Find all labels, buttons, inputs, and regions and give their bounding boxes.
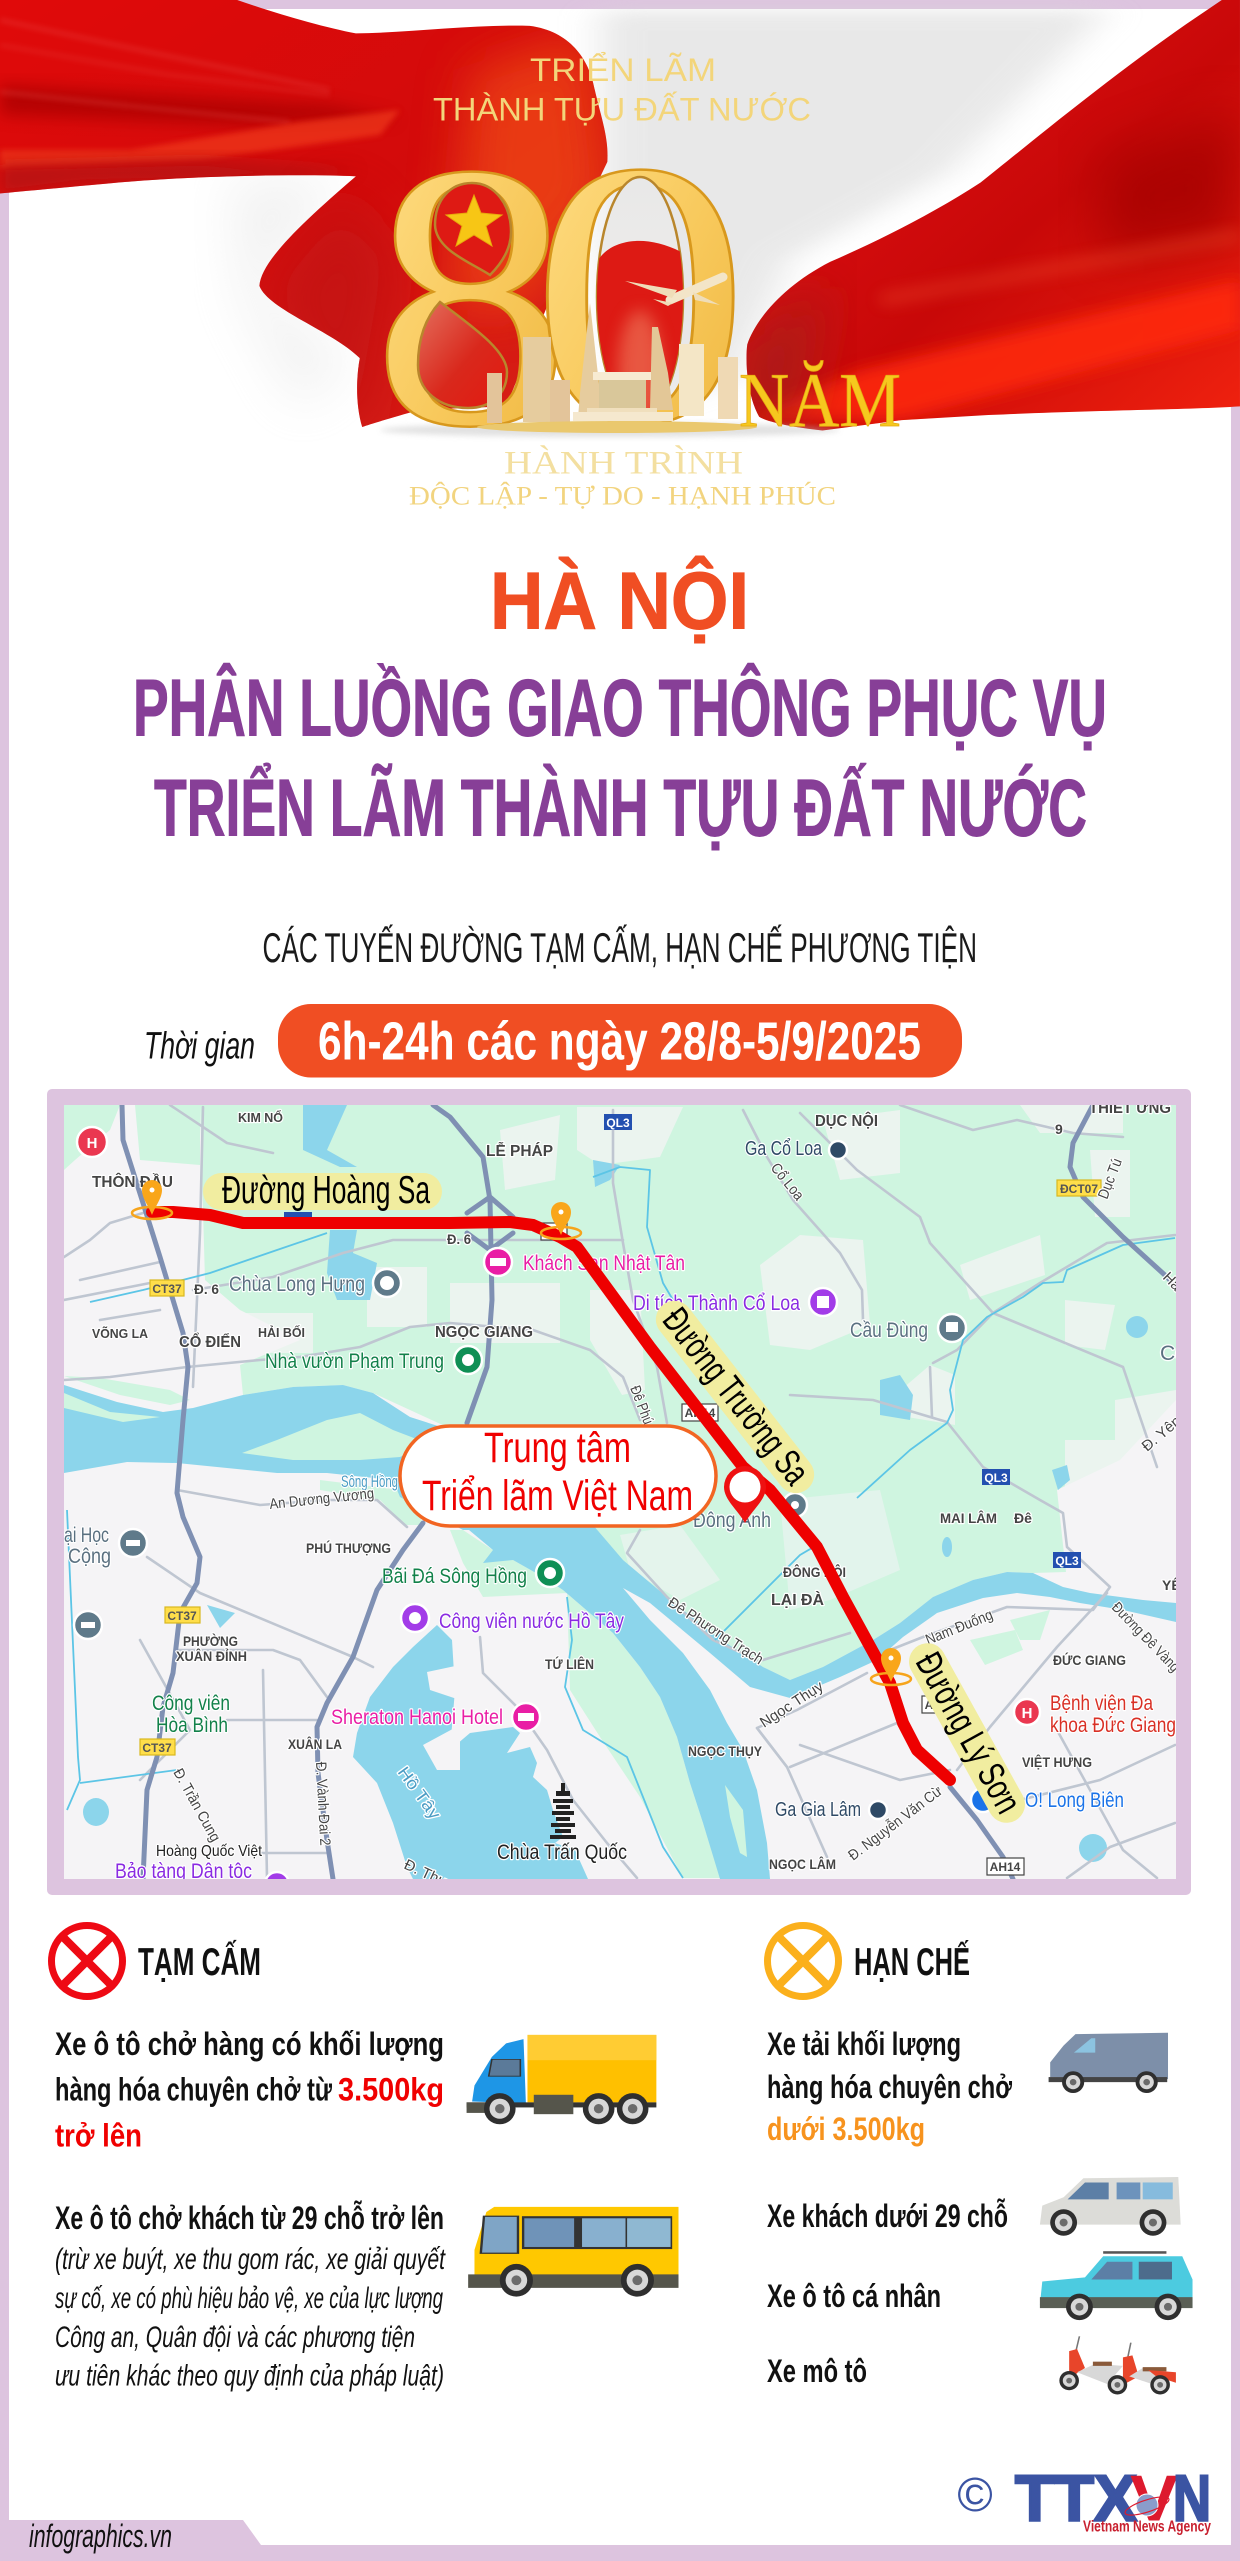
text: exemptions: Công an, Quân đội và các phương tiện	[55, 2321, 415, 2354]
map place labels: THIẾT ỨNG	[1089, 1098, 1171, 1117]
map place labels: Chùa Long Hưng	[229, 1273, 365, 1296]
label: Đường Trường Sa: Đường Trường Sa	[655, 1300, 818, 1492]
text: banned trucks: Xe ô tô chở hàng có khối lượng	[55, 2026, 444, 2062]
red ribbon left and centre	[0, 0, 640, 450]
map place labels: Nhà vườn Phạm Trung	[265, 1350, 444, 1373]
map pins: points of interest	[74, 1127, 1040, 1896]
skyline and mausoleum	[477, 303, 757, 433]
text: banned coaches: Xe ô tô chở khách từ 29 chỗ trở lên	[55, 2200, 444, 2236]
ribbon shadow on the cloth	[230, 10, 1107, 413]
icon: gold star	[446, 195, 502, 246]
map place labels: ĐÔNG HỘI	[783, 1563, 846, 1580]
map place labels: 9	[1055, 1121, 1063, 1137]
icon: minivan	[1040, 2177, 1181, 2236]
map place labels: KIM NỔ	[238, 1110, 283, 1125]
headline: Triển lãm Thành tựu Đất nước: THÀNH TỰU ĐẤT NƯỚC	[433, 92, 811, 128]
orange pin: Đuống bridge	[871, 1648, 911, 1685]
map base layers	[64, 1098, 1187, 1910]
map place labels: Ga Cổ Loa	[745, 1138, 823, 1160]
road shields: CT37	[167, 1609, 197, 1623]
map place labels: VÕNG LA	[92, 1326, 149, 1341]
road shields: QL3	[1055, 1554, 1079, 1568]
route line: closed road in red	[152, 1212, 950, 1780]
map place labels: Đ. Trần Cung	[170, 1766, 224, 1845]
orange pin: Thôn Đầu	[132, 1180, 172, 1219]
text: private cars: Xe ô tô cá nhân	[767, 2278, 941, 2314]
map place labels: VIỆT HƯNG	[1022, 1753, 1092, 1770]
callout: Trung tâm Triển lãm Việt Nam	[400, 1424, 716, 1526]
text: banned trucks	[55, 2026, 444, 2154]
number 80: 8	[372, 87, 570, 505]
road shields: AH14	[925, 1698, 956, 1712]
road shields: AH14	[685, 1406, 716, 1420]
icon: red crossed circle	[52, 1926, 122, 1996]
map place labels: Hà	[1159, 1269, 1185, 1295]
map place labels: Cổ	[1160, 1342, 1187, 1365]
callout: Trung tâm Triển lãm Việt Nam: Trung tâm	[484, 1424, 631, 1472]
logo: TTXVN Vietnam News Agency: N	[1173, 2462, 1211, 2534]
map place labels: Di tích Thành Cổ Loa	[633, 1292, 800, 1315]
map place labels: Nam Đuống	[923, 1606, 995, 1649]
map place labels: THÔN ĐẦU	[92, 1172, 173, 1191]
icon: pagoda	[550, 1783, 576, 1839]
map place labels: Hồ Tây	[394, 1763, 445, 1823]
map place labels: Công viên nước Hồ Tây	[439, 1610, 624, 1633]
map place labels: Đ. Thụy Khuê	[401, 1856, 491, 1910]
number 80	[386, 168, 735, 428]
word NĂM: NĂM	[739, 357, 901, 443]
text: exemptions: (trừ xe buýt, xe thu gom rác, xe giải quyết	[55, 2243, 446, 2276]
icon: airplane	[625, 277, 723, 306]
road shields: QL3	[606, 1116, 630, 1130]
map place labels: MAI LÂM	[940, 1509, 997, 1526]
ground shadow	[380, 423, 840, 437]
time pill: 6h-24h các ngày 28/8-5/9/2025	[318, 1012, 921, 1072]
heading: Hạn chế: HẠN CHẾ	[854, 1940, 970, 1984]
panel: restricted vehicles	[767, 1926, 1193, 2395]
tagline: Hành trình: HÀNH TRÌNH	[504, 444, 743, 482]
map place labels: Dục Tú	[1095, 1156, 1126, 1201]
map place labels	[64, 1098, 1187, 1910]
map place labels: Hòa Bình	[156, 1714, 228, 1737]
text: banned trucks: 3.500kg	[338, 2072, 444, 2108]
logo: TTXVN Vietnam News Agency: V	[1130, 2462, 1178, 2534]
label: Đường Hoàng Sa: Đường Hoàng Sa	[222, 1169, 430, 1212]
header illustration: red flag ribbons and 80 years emblem	[0, 0, 1240, 510]
highways	[122, 1105, 1176, 1879]
label: Đường Trường Sa	[648, 1291, 824, 1501]
streams	[67, 1167, 1175, 1878]
headline: Triển lãm Thành tựu Đất nước	[433, 52, 811, 128]
map place labels: Bệnh viện Đa	[1050, 1692, 1153, 1715]
map place labels: Ngọc Thụy	[757, 1678, 827, 1731]
time label: Thời gian	[144, 1026, 255, 1068]
map place labels: PHÚ THƯỢNG	[306, 1539, 391, 1556]
map place labels: Cộng	[68, 1545, 111, 1568]
inner opening of the zero	[597, 177, 683, 417]
road shields: AH14	[990, 1860, 1021, 1874]
number 80: 0	[531, 84, 750, 503]
map place labels: O! Long Biên	[1025, 1789, 1124, 1812]
map place labels: Đ. Nguyễn Văn Cừ	[845, 1783, 946, 1864]
map place labels: Đê	[1014, 1510, 1032, 1526]
map place labels: ĐỨC GIANG	[1053, 1651, 1126, 1668]
map place labels: NGỌC LÂM	[769, 1855, 836, 1872]
map place labels: Sông Hồng	[341, 1472, 398, 1491]
icon: truck	[467, 2035, 656, 2124]
label: Đường Lý Sơn: Đường Lý Sơn	[908, 1645, 1029, 1820]
map place labels: Chùa Trấn Quốc	[497, 1841, 627, 1864]
road shields: CT37	[142, 1741, 172, 1755]
label: Đường Lý Sơn	[902, 1635, 1035, 1830]
icon: van	[1049, 2033, 1168, 2093]
minor roads	[64, 1105, 1175, 1878]
map place labels: Đ. 6	[447, 1231, 471, 1247]
map place labels: Bãi Đá Sông Hồng	[382, 1565, 527, 1588]
footer tab: infographics.vn: infographics.vn	[29, 2518, 172, 2554]
map place labels: Cầu Đùng	[850, 1319, 928, 1342]
red location pin	[724, 1466, 766, 1523]
map place labels: Bảo tàng Dân tộc	[115, 1860, 252, 1883]
time pill	[278, 1004, 962, 1078]
map place labels: Đ. Yên	[1139, 1413, 1184, 1455]
islands and peninsulas	[64, 1393, 747, 1857]
map place labels: Đ. 6	[194, 1281, 219, 1297]
map place labels: khoa Đức Giang	[1050, 1714, 1176, 1737]
text: restricted trucks	[767, 2026, 1012, 2147]
panel: banned vehicles	[52, 1926, 679, 2392]
map place labels: XUÂN LA	[288, 1735, 342, 1752]
settlement patches	[240, 1105, 1176, 1610]
footer tab: infographics.vn	[0, 2518, 261, 2561]
text: restricted trucks: dưới 3.500kg	[767, 2111, 925, 2147]
text: banned trucks: trở lên	[55, 2118, 142, 2154]
map place labels: Đê Phương Trạch	[665, 1594, 766, 1668]
map place labels: Khách Sạn Nhật Tân	[523, 1252, 685, 1275]
upper loop of the eight	[435, 183, 511, 275]
logo: TTXVN Vietnam News Agency: ©	[957, 2469, 993, 2522]
headline: Triển lãm Thành tựu Đất nước: TRIỂN LÃM	[530, 52, 716, 88]
icon: amber crossed circle	[768, 1926, 838, 1996]
map place labels: XUÂN ĐỈNH	[176, 1647, 247, 1664]
icon: bus	[468, 2207, 679, 2297]
text: exemptions: ưu tiên khác theo quy định của pháp luật)	[55, 2360, 444, 2392]
heading: Tạm cấm: TẠM CẤM	[138, 1940, 261, 1984]
map pins: points of interest: H	[1022, 1705, 1032, 1722]
map place labels: Đ. Vành Đai 2	[312, 1761, 333, 1846]
red ribbon fold seen through the zero	[597, 240, 683, 408]
map place labels: Đông Anh	[693, 1509, 771, 1532]
map place labels: PHƯỜNG	[183, 1632, 238, 1649]
map place labels: NGỌC GIANG	[435, 1324, 533, 1341]
text: restricted trucks: Xe tải khối lượng	[767, 2026, 961, 2062]
map place labels: LẠI ĐÀ	[771, 1590, 824, 1609]
map place labels: LỄ PHÁP	[486, 1141, 553, 1160]
road shields: QL3	[984, 1471, 1008, 1485]
map place labels: An Dương Vương	[269, 1485, 375, 1513]
map place labels: CỔ ĐIỂN	[179, 1332, 241, 1351]
road shields: ĐCT07	[1060, 1182, 1098, 1196]
title: Hà Nội: HÀ NỘI	[490, 556, 749, 646]
water: rivers and lakes	[64, 1105, 1176, 1879]
tagline: Độc lập - Tự do - Hạnh phúc: ĐỘC LẬP - TỰ DO - HẠNH PHÚC	[409, 482, 836, 510]
text: restricted trucks: hàng hóa chuyên chở	[767, 2069, 1012, 2105]
map place labels: DỤC NỘI	[815, 1111, 878, 1130]
map place labels: Sheraton Hanoi Hotel	[331, 1706, 503, 1729]
label: Đường Hoàng Sa	[203, 1169, 442, 1212]
text: minibus: Xe khách dưới 29 chỗ	[767, 2198, 1008, 2234]
text: exemptions: sự cố, xe có phù hiệu bảo vệ, xe của lực lượng	[55, 2282, 443, 2315]
road shields	[140, 1114, 1101, 1875]
map place labels: Hoàng Quốc Việt	[156, 1843, 262, 1860]
text: banned trucks: hàng hóa chuyên chở từ	[55, 2072, 333, 2108]
map place labels: NGỌC THỤY	[688, 1743, 763, 1759]
map place labels: YÊ	[1162, 1576, 1181, 1593]
map pins: points of interest: H	[87, 1135, 97, 1152]
map place labels: Ga Gia Lâm	[775, 1799, 861, 1821]
icon: motorbikes	[1059, 2336, 1176, 2395]
icon: blue car	[1040, 2251, 1193, 2320]
logo: TTXVN Vietnam News Agency: TTX	[1015, 2462, 1137, 2534]
text: exemptions	[55, 2243, 446, 2392]
callout: Trung tâm Triển lãm Việt Nam: Triển lãm Việt Nam	[422, 1472, 693, 1520]
map place labels: Đường Đê Vàng	[1108, 1599, 1183, 1676]
map place labels: ại Học	[64, 1524, 109, 1547]
text: motorbikes: Xe mô tô	[767, 2353, 867, 2389]
map place labels: HẢI BỐI	[258, 1325, 305, 1340]
road shields: CT37	[152, 1282, 182, 1296]
map place labels: Cổ Loa	[767, 1160, 808, 1204]
lower loop of the eight	[418, 302, 507, 408]
map place labels: Đê Phú	[626, 1383, 656, 1427]
title: main heading	[133, 662, 1107, 854]
orange pin: Nhật Tân	[541, 1202, 581, 1239]
logo: TTXVN Vietnam News Agency	[957, 2462, 1211, 2536]
red ribbon right	[740, 0, 1240, 440]
map place labels: TỨ LIÊN	[545, 1655, 594, 1672]
map place labels: Công viên	[152, 1692, 230, 1715]
panel: route map	[0, 1089, 1211, 2561]
